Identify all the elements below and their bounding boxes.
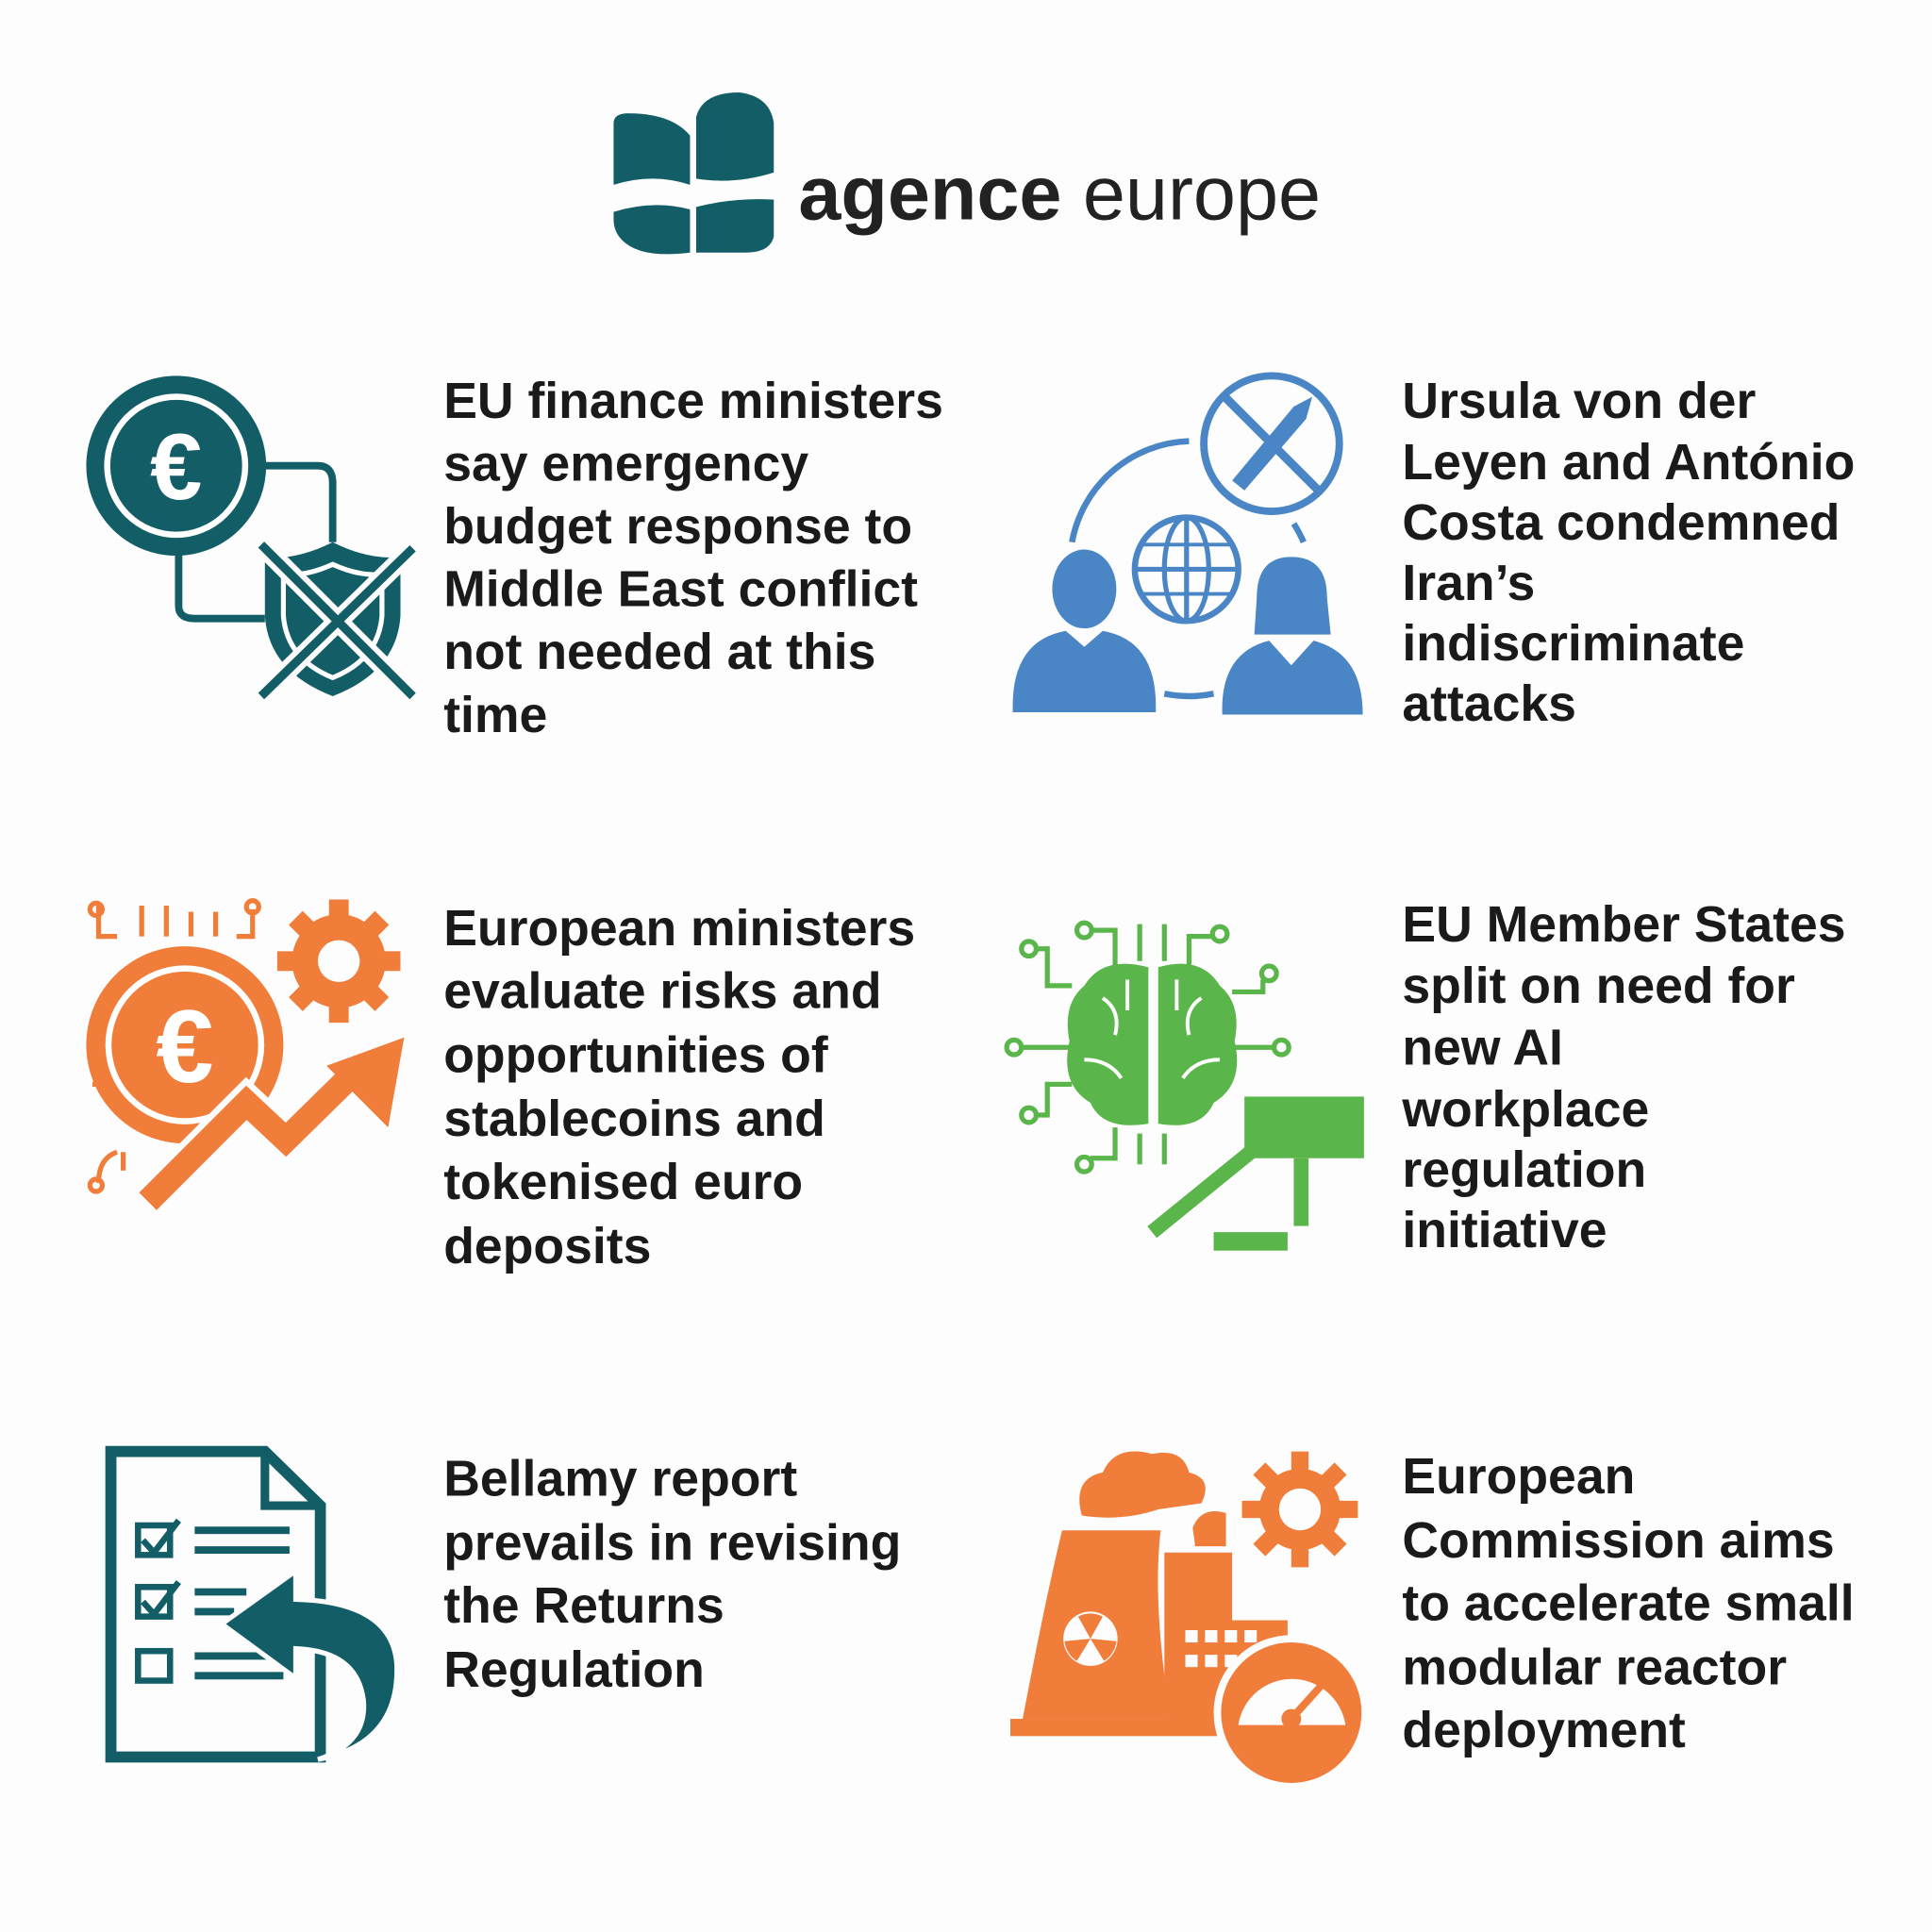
text block: Costa condemned (1402, 495, 1840, 551)
logo mark (613, 92, 774, 254)
text block: European ministers (443, 901, 915, 957)
panel: Bellamy report (111, 1452, 397, 1759)
text block: not needed at this (443, 625, 875, 680)
text block: evaluate risks and (443, 963, 882, 1019)
text block: split on need for (1402, 958, 1795, 1014)
icon: euro coin and shield: € (150, 415, 202, 520)
panel: small modular reactor (1010, 1449, 1855, 1787)
text block: deployment (1402, 1703, 1686, 1758)
logo (613, 92, 1321, 254)
text block: time (443, 688, 547, 743)
text block: to accelerate small (1402, 1576, 1855, 1632)
text block: say emergency (443, 436, 808, 491)
text block: opportunities of (443, 1027, 828, 1083)
icon: euro coin gear arrow: € (156, 990, 213, 1105)
text block: Iran’s (1402, 556, 1535, 611)
text block: Ursula von der (1402, 374, 1756, 429)
text block: indiscriminate (1402, 616, 1744, 672)
text block: Commission aims (1402, 1513, 1835, 1569)
text block: Leyen and António (1402, 435, 1855, 491)
text block: the Returns (443, 1578, 724, 1634)
text block: tokenised euro (443, 1155, 803, 1210)
text block: modular reactor (1402, 1640, 1787, 1695)
text block: Regulation (443, 1642, 705, 1698)
text block: regulation (1402, 1142, 1646, 1198)
logo text: agence europe (798, 151, 1321, 236)
icon: leaders globe crossed rocket (1013, 375, 1363, 715)
text block: Middle East conflict (443, 562, 918, 618)
text block: new AI (1402, 1020, 1563, 1075)
panel: AI workplace (1007, 897, 1846, 1258)
icon: nuclear plant gear gauge (1010, 1452, 1365, 1787)
icon: euro coin gear arrow (86, 899, 404, 1201)
panel: von der Leyen and Costa (1013, 374, 1855, 732)
text block: EU Member States (1402, 897, 1846, 953)
text block: Bellamy report (443, 1452, 797, 1507)
icon: checklist document with return arrow (111, 1452, 321, 1757)
text block: initiative (1402, 1203, 1607, 1258)
panel: finance ministers (86, 374, 943, 743)
text block: budget response to (443, 499, 912, 555)
panel: stablecoins (86, 899, 915, 1274)
text block: prevails in revising (443, 1516, 901, 1572)
text block: stablecoins and (443, 1091, 825, 1147)
icon: brain circuit gavel (1007, 923, 1364, 1251)
icon: euro coin and shield (86, 375, 413, 696)
text block: EU finance ministers (443, 374, 943, 429)
text block: attacks (1402, 676, 1576, 732)
text block: deposits (443, 1219, 651, 1274)
text block: workplace (1401, 1082, 1649, 1138)
text block: European (1402, 1449, 1635, 1505)
